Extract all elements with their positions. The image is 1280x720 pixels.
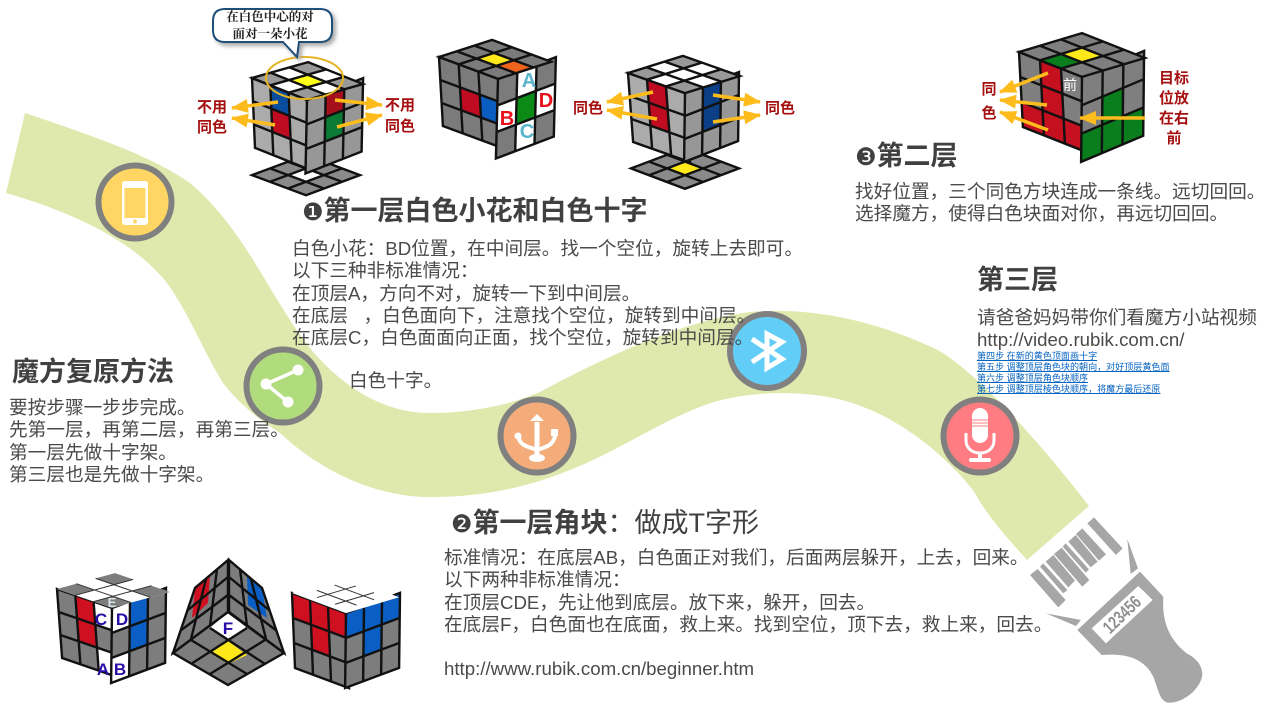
highlight ellipse	[266, 57, 343, 99]
arrows: same colour	[607, 92, 760, 122]
text: step 1 body: 以下三种非标准情况：	[292, 260, 479, 281]
links: steps four to seven: 第四步 在新的黄色顶面画十字	[977, 351, 1097, 361]
label: target position: 在右	[1159, 110, 1189, 127]
heading: step 3 second layer: ❸第二层	[855, 141, 958, 171]
cube: corners C D E A B: D	[116, 610, 128, 629]
cube: positions A B C D	[439, 40, 556, 158]
label: same colour vertical: 色	[981, 104, 997, 122]
icon: microphone	[944, 400, 1016, 472]
callout: 面对一朵小花	[232, 26, 308, 41]
label: left no same colour: 同色	[197, 118, 227, 136]
text: third layer body	[977, 307, 1257, 350]
text: step 2 body: 在顶层CDE，先让他到底层。放下来，躲开，回去。	[444, 592, 875, 613]
label: target position: 目标	[1159, 70, 1189, 87]
text: step 2 body	[444, 547, 1052, 679]
label: left no same colour	[197, 99, 227, 136]
links: steps four to seven	[977, 351, 1170, 394]
cube: positions A B C D: D	[539, 90, 553, 112]
cube: bottom view with F: F	[223, 619, 233, 638]
icon: usb	[500, 400, 574, 472]
text: second layer body: 找好位置，三个同色方块连成一条线。远切回回。	[855, 181, 1265, 202]
cube: positions A B C D: A	[522, 70, 536, 92]
label: same colour vertical: 同	[981, 81, 997, 98]
label: left same colour: 同色	[573, 99, 603, 117]
icon: bluetooth	[730, 314, 804, 388]
heading: step 2: ❷第一层角块：做成T字形	[451, 508, 759, 538]
text: step 1 body: 在底层C，白色面面向正面，找个空位，旋转到中间层。	[292, 327, 753, 348]
label: target position: 前	[1166, 129, 1182, 147]
text: intro: 第一层先做十字架。	[9, 442, 177, 463]
text: white cross: 白色十字。	[349, 370, 442, 391]
cube: white flower with base plate	[252, 62, 363, 195]
cube: second layer: 前	[1063, 77, 1077, 93]
text: second layer body: 选择魔方，使得白色块面对你，再远切回回。	[855, 203, 1228, 224]
text: step 1 body: 白色小花：BD位置，在中间层。找一个空位，旋转上去即可。	[292, 238, 803, 259]
cube: positions A B C D: B	[500, 108, 514, 130]
cube: positions A B C D: C	[520, 121, 534, 143]
label: right no same colour: 同色	[385, 117, 415, 135]
text: step 2 body: 以下两种非标准情况：	[444, 569, 631, 590]
text: intro: 要按步骤一步步完成。	[9, 397, 196, 418]
icon: phone	[98, 166, 172, 238]
text: step 1 body: 在底层 ，白色面向下，注意找个空位，旋转到中间层。	[292, 305, 755, 326]
arrows: second layer	[1000, 73, 1145, 130]
cube: corners C D E A B: A	[97, 660, 109, 679]
text: third layer body: http://video.rubik.com.cn/	[977, 329, 1184, 350]
text: step 2 body: http://www.rubik.com.cn/beginner.htm	[444, 658, 754, 679]
cube: corners C D E A B	[57, 573, 170, 683]
cube: corners C D E A B: E	[108, 595, 117, 610]
heading: third layer: 第三层	[977, 265, 1058, 295]
links: steps four to seven: 第五步 调整顶层角色块的朝向，对好顶层黄色面	[977, 362, 1170, 372]
text: third layer body: 请爸爸妈妈带你们看魔方小站视频	[977, 307, 1257, 328]
icon: paint brush with barcode: 123456	[1099, 592, 1145, 637]
label: right no same colour: 不用	[385, 97, 415, 114]
cube: corners C D E A B: C	[95, 610, 107, 629]
label: right same colour: 同色	[765, 99, 795, 117]
cube: completed T shape	[292, 577, 400, 688]
text: intro	[9, 397, 289, 485]
text: second layer body	[855, 181, 1265, 224]
text: step 1 body: 在顶层A，方向不对，旋转一下到中间层。	[292, 283, 640, 304]
cube: corners C D E A B: B	[114, 660, 126, 679]
heading: step 1: ❶第一层白色小花和白色十字	[302, 196, 648, 226]
label: left no same colour: 不用	[197, 99, 227, 116]
text: step 2 body: 标准情况：在底层AB，白色面正对我们，后面两层躲开，上去，回来。	[444, 547, 1029, 568]
text: step 2 body: 在底层F，白色面也在底面，救上来。找到空位，顶下去，救上来，回去。	[444, 614, 1052, 635]
label: target position: 位放	[1159, 89, 1189, 107]
icon: share	[246, 350, 320, 422]
cube: bottom view with F	[173, 560, 284, 685]
arrows: no same colour	[232, 100, 382, 127]
label: right no same colour	[385, 97, 415, 135]
callout	[213, 9, 332, 57]
links: steps four to seven: 第七步 调整顶层棱色块顺序，将魔方最后还原	[977, 384, 1160, 394]
text: intro: 先第一层，再第二层，再第三层。	[9, 419, 289, 440]
text: intro: 第三层也是先做十字架。	[9, 464, 214, 485]
ribbon path	[6, 113, 1089, 560]
cube: same colour with base plate	[628, 56, 740, 189]
label: same colour vertical	[981, 81, 997, 122]
cube: second layer	[1019, 33, 1145, 162]
callout: 在白色中心的对	[226, 9, 314, 24]
icon: paint brush with barcode	[1030, 517, 1202, 703]
text: step 1 body	[292, 238, 803, 348]
links: steps four to seven: 第六步 调整顶层角色块顺序	[977, 373, 1088, 383]
label: target position	[1159, 70, 1189, 147]
heading: main title: 魔方复原方法	[12, 357, 174, 387]
